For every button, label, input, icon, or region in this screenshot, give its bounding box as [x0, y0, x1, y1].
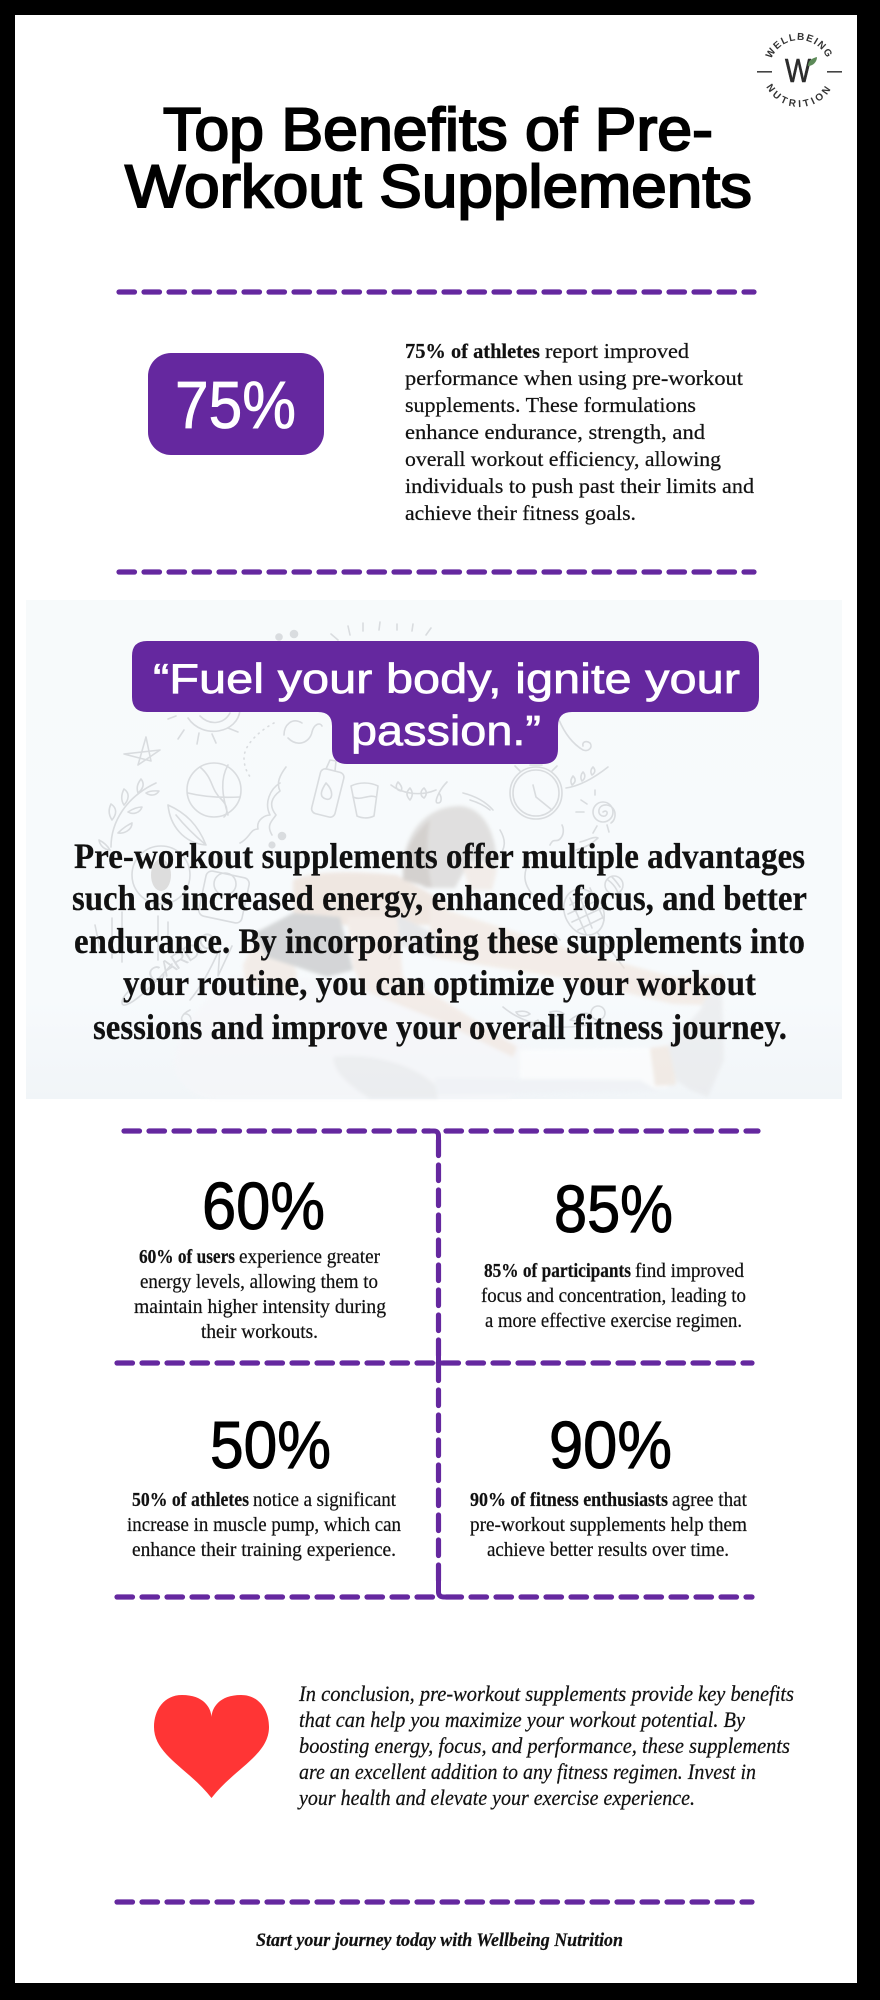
conclusion text: that can help you maximize your workout potential. By	[299, 1707, 745, 1732]
panel background	[26, 600, 842, 1099]
stat cell: 60%: experience greater	[239, 1247, 380, 1268]
stat description: 75% of athletes	[405, 339, 540, 363]
photo: woman stretching	[175, 806, 726, 1099]
summary paragraph: Pre-workout supplements offer multiple advantages	[74, 836, 805, 876]
panel: photo background with quote and summary	[26, 600, 842, 1099]
logo: Wellbeing Nutrition: NUTRITION	[766, 84, 830, 108]
stat cell: 60%: 60%	[202, 1169, 325, 1244]
summary paragraph: sessions and improve your overall fitness journey.	[93, 1007, 787, 1047]
stat badge: 75%: 75%	[175, 368, 296, 443]
stat cell: 50%: enhance their training experience.	[132, 1540, 396, 1561]
stat cell: 60%: energy levels, allowing them to	[140, 1272, 378, 1293]
title: Top Benefits of Pre-	[163, 96, 713, 163]
stat cell: 90%: 90%	[549, 1408, 672, 1483]
divider bottom	[117, 1899, 752, 1905]
quote banner: passion.”	[351, 707, 541, 754]
conclusion text: In conclusion, pre-workout supplements provide key benefits	[298, 1681, 794, 1706]
stat cell: 50%: 50%	[210, 1408, 331, 1483]
summary paragraph	[72, 836, 807, 1047]
stat cell: 85%: 85% of participants	[484, 1261, 631, 1282]
logo: Wellbeing Nutrition	[757, 32, 842, 108]
stat cell: 85%	[481, 1172, 746, 1332]
left shoe	[333, 1056, 438, 1099]
stat description: achieve their fitness goals.	[405, 501, 636, 525]
doodle icons: CARDIO	[143, 925, 224, 989]
hair	[403, 806, 497, 888]
stat cell: 90%	[470, 1408, 748, 1561]
stat cell: 60%: their workouts.	[201, 1322, 318, 1343]
grid dividers	[117, 1131, 758, 1597]
quote banner: “Fuel your body, ignite your	[153, 655, 740, 702]
stat cell: 50%: notice a significant	[253, 1490, 397, 1511]
stat description: report improved	[545, 339, 689, 363]
stat badge: 75%	[148, 353, 324, 455]
stat description: enhance endurance, strength, and	[405, 420, 705, 444]
stat cell: 90%: pre-workout supplements help them	[470, 1515, 747, 1536]
stat description: individuals to push past their limits and	[405, 474, 754, 498]
stat cell: 85%: focus and concentration, leading to	[481, 1286, 746, 1307]
stat cell: 90%: achieve better results over time.	[487, 1540, 729, 1561]
divider top	[119, 289, 754, 295]
skin: arm resting	[347, 917, 517, 1057]
ankle	[650, 1045, 676, 1086]
stat cell: 60%	[134, 1169, 386, 1343]
icon: heart	[154, 1695, 269, 1798]
stat description: overall workout efficiency, allowing	[405, 447, 721, 471]
stat cell: 60%: 60% of users	[139, 1247, 235, 1268]
conclusion text: boosting energy, focus, and performance, these supplements	[299, 1733, 790, 1758]
stat description	[405, 339, 754, 525]
summary paragraph: endurance. By incorporating these supplements into	[74, 921, 805, 961]
conclusion text	[297, 1681, 794, 1810]
title	[125, 96, 752, 220]
right shoe	[668, 985, 724, 1097]
conclusion text: are an excellent addition to any fitness regimen. Invest in	[299, 1759, 756, 1784]
skin: lower back	[243, 935, 297, 996]
leggings	[175, 975, 530, 1099]
logo: Wellbeing Nutrition: W	[785, 52, 812, 89]
logo: Wellbeing Nutrition: WELLBEING	[765, 32, 832, 58]
sports top	[255, 913, 353, 977]
stat description: performance when using pre-workout	[405, 366, 743, 390]
stat cell: 50%	[127, 1408, 401, 1561]
skin: shoulder and neck	[293, 872, 450, 925]
quote banner	[132, 641, 759, 764]
stat description: supplements. These formulations	[405, 393, 696, 417]
stat cell: 85%: find improved	[635, 1261, 744, 1282]
stat cell: 85%: 85%	[554, 1172, 673, 1247]
title: Workout Supplements	[125, 153, 752, 220]
arm band	[397, 915, 437, 958]
face	[463, 863, 497, 890]
footer call to action: Start your journey today with Wellbeing Nutrition	[256, 1931, 623, 1951]
divider below stat	[119, 569, 754, 575]
stat cell: 50%: increase in muscle pump, which can	[127, 1515, 401, 1536]
stat cell: 85%: a more effective exercise regimen.	[485, 1311, 742, 1332]
conclusion text: your health and elevate your exercise experience.	[297, 1785, 695, 1810]
stat cell: 60%: maintain higher intensity during	[134, 1297, 386, 1318]
summary paragraph: such as increased energy, enhanced focus, and better	[72, 878, 807, 918]
stat cell: 90%: 90% of fitness enthusiasts	[470, 1490, 668, 1511]
summary paragraph: your routine, you can optimize your workout	[123, 963, 756, 1003]
stat cell: 50%: 50% of athletes	[132, 1490, 249, 1511]
doodle icons	[95, 622, 624, 1032]
skin: arm reaching foot	[430, 905, 726, 1005]
stat cell: 90%: agree that	[672, 1490, 748, 1511]
stat block: 75% of athletes	[148, 339, 754, 525]
